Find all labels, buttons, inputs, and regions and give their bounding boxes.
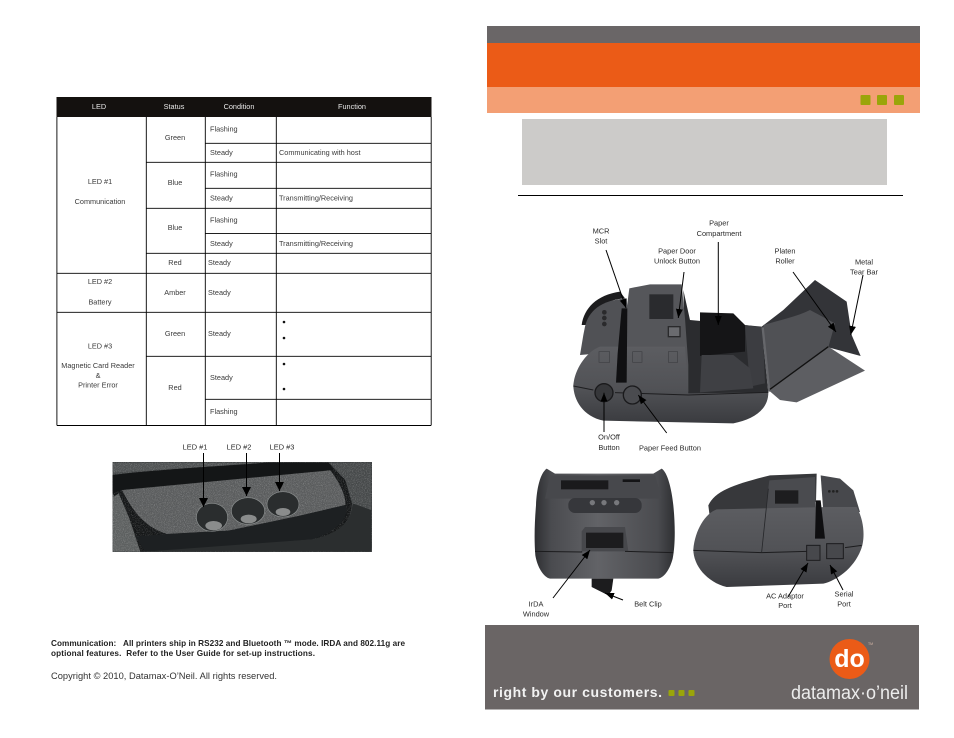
row group: LED 1 communication: Transmitting/Receiving xyxy=(279,239,353,248)
printer callout labels: Serial xyxy=(835,590,854,598)
printer callout labels: Slot xyxy=(595,236,607,246)
row group: LED 1 communication: Red xyxy=(168,258,182,267)
printer: open view xyxy=(573,280,865,423)
row group: LED 3 card reader and printer error: Flashing xyxy=(210,407,238,416)
printer callout labels: Window xyxy=(523,610,550,618)
LED labels and arrows: LED #2 xyxy=(227,442,251,452)
printer callout labels: Button xyxy=(598,443,620,452)
note: communication xyxy=(51,639,405,658)
printer callout labels: Belt Clip xyxy=(634,600,662,608)
row group: LED 1 communication: Flashing xyxy=(210,170,238,178)
note: communication: Communication: All printers ship in RS232 and Bluetooth ™ mode. IRDA and 802.11g are xyxy=(51,639,405,648)
printer callout labels xyxy=(523,218,879,618)
row group: LED 3 card reader and printer error: Printer Error xyxy=(78,380,118,390)
row group: LED 3 card reader and printer error: & xyxy=(96,371,101,380)
printer callout labels: Port xyxy=(837,600,851,608)
row group: LED 3 card reader and printer error: Magnetic Card Reader xyxy=(61,361,135,370)
printer callout labels: Metal xyxy=(855,258,873,266)
printer callout labels: Paper Door xyxy=(658,246,696,256)
table header row: Status xyxy=(164,102,185,111)
footer panel xyxy=(485,625,919,710)
printer callout labels: Unlock Button xyxy=(654,256,700,266)
printer callout labels: Port xyxy=(778,601,792,610)
grey intro box xyxy=(522,119,887,185)
printer callout labels: MCR xyxy=(593,226,609,236)
panel: LED status table xyxy=(56,97,432,426)
logo: datamax-o'neil: do xyxy=(834,645,865,673)
row group: LED 1 communication: LED #1 xyxy=(88,177,112,186)
table header row xyxy=(56,97,432,117)
table header row: Condition xyxy=(224,102,254,111)
table header row: Function xyxy=(338,102,366,111)
row group: LED 2 battery: Amber xyxy=(164,288,186,297)
row group: LED 3 card reader and printer error xyxy=(61,321,285,416)
printer callout labels: Paper Feed Button xyxy=(639,444,701,452)
printer callout labels: AC Adaptor xyxy=(766,592,804,600)
row group: LED 1 communication xyxy=(75,124,361,267)
header band xyxy=(487,26,920,113)
note: communication: optional features. Refer to the User Guide for set-up instructions. xyxy=(51,649,315,658)
row group: LED 1 communication: Steady xyxy=(210,194,233,202)
logo: datamax-o'neil xyxy=(791,639,908,704)
row group: LED 1 communication: Steady xyxy=(210,148,233,157)
table grid xyxy=(57,117,431,426)
logo: datamax-o'neil: TM xyxy=(868,642,873,646)
row group: LED 3 card reader and printer error: Steady xyxy=(210,373,233,382)
row group: LED 3 card reader and printer error: Green xyxy=(165,329,185,338)
row group: LED 1 communication: Green xyxy=(165,133,185,142)
row group: LED 2 battery: Battery xyxy=(88,298,112,306)
printer: front view xyxy=(535,469,675,595)
row group: LED 1 communication: Steady xyxy=(208,258,231,267)
printer callout labels: Roller xyxy=(775,256,795,266)
table header row: LED xyxy=(92,102,106,111)
tagline: right by our customers. xyxy=(493,684,662,700)
printer callout labels: Platen xyxy=(775,246,795,256)
row group: LED 2 battery xyxy=(88,277,231,306)
row group: LED 2 battery: Steady xyxy=(208,288,231,297)
row group: LED 1 communication: Communicating with host xyxy=(279,148,361,157)
printer callout labels: On/Off xyxy=(598,432,621,442)
row group: LED 3 card reader and printer error: Steady xyxy=(208,329,231,338)
printer callout labels: Tear Bar xyxy=(850,268,879,276)
printer: side view xyxy=(693,474,864,587)
LED labels and arrows xyxy=(183,442,294,507)
copyright: Copyright © 2010, Datamax-O’Neil. All rights reserved. xyxy=(51,671,277,681)
row group: LED 2 battery: LED #2 xyxy=(88,277,112,286)
row group: LED 1 communication: Blue xyxy=(168,223,182,232)
row group: LED 1 communication: Communication xyxy=(75,197,125,206)
LED labels and arrows: LED #1 xyxy=(183,442,207,452)
printer callout labels: IrDA xyxy=(529,600,543,608)
printer callout labels: Paper xyxy=(709,218,729,228)
row group: LED 3 card reader and printer error: Red xyxy=(168,383,182,392)
row group: LED 1 communication: Transmitting/Receiving xyxy=(279,194,353,202)
row group: LED 1 communication: Blue xyxy=(168,178,182,187)
callout arrows xyxy=(553,242,863,600)
row group: LED 1 communication: Steady xyxy=(210,239,233,248)
LED labels and arrows: LED #3 xyxy=(270,442,294,452)
row group: LED 3 card reader and printer error: LED #3 xyxy=(88,342,112,350)
photo: LED close-up xyxy=(112,462,372,552)
row group: LED 1 communication: Flashing xyxy=(210,216,238,224)
printer callout labels: Compartment xyxy=(697,229,741,238)
logo: datamax-o'neil: datamax·o’neil xyxy=(791,683,908,704)
tagline dots xyxy=(668,690,694,696)
row group: LED 1 communication: Flashing xyxy=(210,124,238,134)
